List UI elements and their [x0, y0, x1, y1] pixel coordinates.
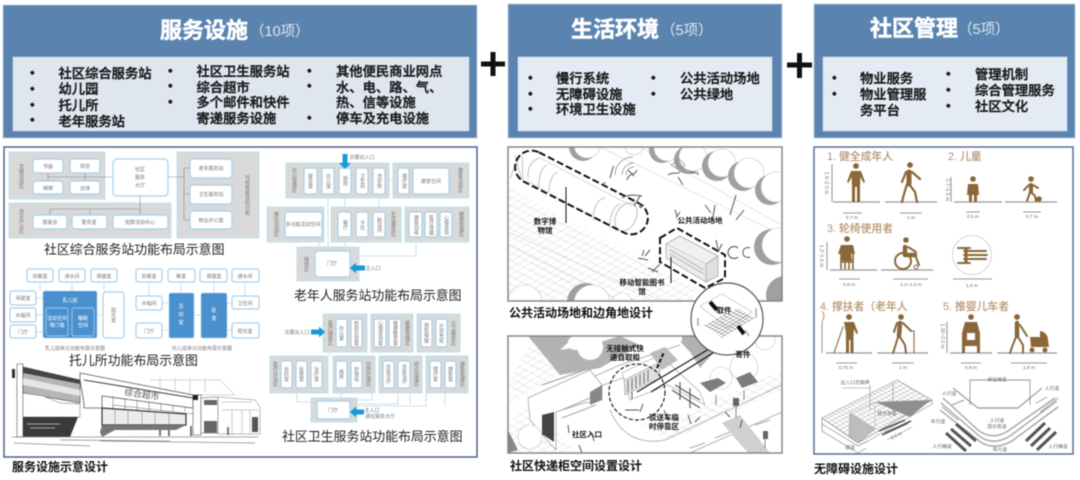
diagram: community health station layout: 办公室	[338, 325, 344, 341]
diagram: nursery layout: 卧	[211, 307, 217, 314]
group 4: assisted walker (elderly): ）	[821, 310, 832, 323]
diagram: nursery layout: 活	[178, 303, 184, 310]
list box: community management: 社区文化	[975, 98, 1028, 114]
list box: living environment: •	[528, 101, 533, 116]
list box: service facilities: 社区综合服务站	[58, 65, 152, 81]
list box: service facilities: 热、信等设施	[336, 94, 416, 110]
heading: living environment	[571, 17, 713, 42]
diagram: community health station layout: 预防保健	[423, 322, 429, 344]
list box: service facilities: 其他便民商业网点	[336, 64, 442, 79]
list box: living environment: 公共活动场地	[680, 71, 760, 86]
diagram: curved tactile paving plan	[931, 376, 1068, 453]
diagram: curved tactile paving plan: 缘石坡道	[987, 376, 1007, 383]
diagram: nursery layout: 双餐室	[141, 273, 157, 280]
diagram: community health station layout: 综合治理区	[413, 361, 419, 387]
diagram: elderly service station layout: 心理咨询	[443, 214, 449, 236]
panel: living environment header	[508, 4, 782, 138]
heading: living environment: （5项）	[661, 22, 713, 39]
diagram: elderly service station layout: 医疗保健	[428, 215, 434, 236]
diagram: community health station layout: 通往服务大厅	[365, 413, 395, 420]
diagram: community service station layout: 棋牌	[43, 185, 53, 192]
diagram: community service station layout: 阅览	[80, 163, 90, 170]
street poles and people	[568, 392, 768, 453]
heading: community management: 社区管理	[870, 16, 958, 41]
list box: community management: 物业管理服	[860, 86, 926, 102]
diagram: curved tactile paving plan: 人行横道	[932, 443, 952, 450]
diagram: curb ramp isometric: 坡道	[845, 444, 855, 451]
illustration: supermarket building	[12, 364, 260, 446]
list box: living environment: 公共绿地	[680, 87, 733, 102]
diagram: community health station layout: 处置室	[298, 366, 304, 382]
illustration: digital museum pavilion	[526, 158, 642, 235]
people and plants sketches	[603, 157, 750, 272]
diagram: nursery layout: 保健室	[206, 273, 222, 280]
diagram: nursery layout: 睡眠	[78, 315, 88, 322]
diagram: community service station layout: 物业办公室	[198, 217, 224, 224]
label: delivery vehicle stop: 驳送车临	[649, 412, 679, 422]
diagram: nursery layout: 乳儿班	[62, 297, 78, 304]
diagram: community service station layout: 警务室	[81, 219, 97, 226]
label: digital museum: 数字博	[534, 216, 557, 226]
list box: service facilities: •	[307, 63, 312, 78]
diagram: community health station layout: 公卫服务区	[450, 320, 456, 346]
label: public activity area: 公共活动场地	[678, 215, 723, 225]
diagram: nursery layout: 阳光室	[237, 328, 253, 335]
list box: living environment: 慢行系统	[556, 70, 609, 86]
diagram: elderly service station layout: 卫生间	[359, 174, 365, 190]
diagram: nursery layout: 门厅	[18, 329, 28, 336]
list box: community management: 物业服务	[860, 71, 913, 86]
label: delivery vehicle stop: 时停靠区	[649, 421, 679, 431]
diagram: elderly service station layout: 餐厅	[342, 219, 348, 230]
label: no-contact locker	[606, 343, 644, 362]
diagram: community service station layout: 可统筹建设的功能	[244, 175, 250, 216]
group 5: stroller pusher: 0.8 m	[965, 365, 977, 371]
dashed circle: no-contact locker zone	[609, 364, 665, 420]
group 5: stroller pusher: 1.8 m	[1023, 365, 1035, 371]
list box: living environment: •	[528, 86, 533, 101]
diagram: elderly service station layout: 多功能活动空间	[285, 221, 321, 228]
diagram: curved tactile paving plan: 车行道	[993, 446, 1007, 453]
diagram: community health station layout: 医疗辅助区	[327, 320, 333, 346]
plus sign 2	[787, 53, 812, 78]
list box: service facilities: 多个邮件和快件	[196, 94, 290, 110]
group 3: wheelchair user: 3. 轮椅使用者	[827, 221, 893, 235]
diagram: nursery layout: 喂汀箱	[49, 322, 65, 329]
label: digital museum	[534, 216, 557, 235]
diagram: elderly service station layout: 主入口	[365, 265, 381, 272]
diagram: curved tactile paving plan: 人行道	[990, 417, 1004, 424]
diagram: nursery layout: 空间	[78, 322, 88, 329]
diagram: community health station layout: 中医诊疗	[385, 363, 391, 385]
list box: service facilities	[13, 57, 469, 131]
inset circle: pickup and sending area	[691, 283, 763, 359]
caption: accessibility design: 无障碍设施设计	[814, 461, 898, 476]
list box: community management: 管理机制	[975, 66, 1028, 82]
diagram: community service station layout: 文娱活动区	[18, 163, 24, 189]
list box: service facilities: 综合超市	[196, 79, 250, 95]
arrow: secondary entrance	[311, 326, 325, 338]
diagram: community service station layout	[9, 152, 259, 238]
title: nursery layout: 托儿所功能布局示意图	[69, 353, 198, 368]
diagram: nursery layout: 餐室	[176, 273, 186, 280]
group 2: child	[944, 149, 1057, 220]
list box: community management: •	[946, 66, 951, 81]
list box: service facilities: •	[307, 78, 312, 93]
group 5: stroller pusher: 5. 推婴儿车者	[943, 299, 1009, 313]
group 2: child: 2. 儿童	[948, 149, 982, 163]
diagram: community health station layout: 护理站	[353, 366, 359, 383]
diagram: curved tactile paving plan: 提示盲道	[987, 423, 1007, 430]
diagram: nursery layout: 室	[178, 319, 184, 326]
label: mobile smart library: 移动智能图书	[620, 277, 665, 287]
label: delivery vehicle stop	[649, 412, 679, 431]
diagram: community service station layout: 党群活动中心	[125, 219, 155, 226]
list box: service facilities: 社区卫生服务站	[196, 64, 290, 79]
diagram: curb ramp isometric	[822, 379, 932, 453]
panel: service facility diagrams	[4, 147, 477, 457]
diagram: community health station layout: 住院护理区	[365, 361, 371, 387]
diagram: elderly service station layout: 助浴间	[376, 217, 382, 234]
diagram: community health station layout: 健康管理区	[404, 320, 410, 346]
diagram: curved tactile paving plan: 车行道	[931, 418, 945, 425]
diagram: community health station layout: 全科室	[283, 366, 289, 382]
diagram: elderly service station layout: 康乐活动区	[273, 211, 279, 237]
list box: living environment	[518, 57, 772, 131]
panel: community management header	[814, 4, 1075, 138]
list box: living environment: •	[651, 86, 656, 101]
diagram: elderly service station layout: 次要出入口	[349, 154, 375, 161]
list box: community management: •	[946, 82, 951, 97]
list box: community management: •	[946, 98, 951, 113]
caption: service facility design: 服务设施示意设计	[12, 459, 108, 474]
diagram: curved tactile paving plan: 人行道	[942, 390, 956, 397]
group 3: wheelchair user: 0.8 m	[843, 282, 855, 288]
label: pickup: 取件	[716, 305, 732, 315]
list box: community management: 综合管理服务	[975, 82, 1055, 98]
diagram: community health station layout: 心理咨询室	[377, 320, 383, 346]
diagram: nursery layout: 通水间	[237, 273, 253, 280]
diagram: elderly service station layout: 生活服务区	[390, 211, 396, 237]
diagram: community health station layout: 病房	[338, 368, 344, 380]
list box: service facilities: •	[30, 81, 35, 96]
diagram: community service station layout: 大厅	[135, 182, 145, 189]
group 1: able-bodied adult: 1.6~2.0 m	[823, 172, 829, 194]
list box: service facilities: •	[30, 65, 35, 80]
diagram: community service station layout: 卫生服务站	[198, 191, 224, 198]
panel: accessibility diagrams	[814, 147, 1073, 454]
label: send: 寄件	[736, 349, 751, 359]
group 5: stroller pusher: 1.35~2.0 m	[939, 323, 945, 349]
group 3: wheelchair user: 1.2~1.4 m	[818, 245, 824, 267]
label: digital museum: 物馆	[538, 225, 553, 235]
list box: service facilities: 幼儿园	[58, 82, 98, 96]
list box: service facilities: •	[30, 97, 35, 112]
diagram: nursery layout	[10, 269, 259, 352]
list box: living environment: 无障碍设施	[556, 86, 622, 102]
list box: service facilities: 托儿所	[58, 98, 98, 113]
diagram: community health station layout: 医疗诊治区	[272, 362, 278, 387]
caption: public space design: 公共活动场地和边角地设计	[509, 305, 653, 320]
diagram: elderly service station layout: 康复活动区	[457, 167, 463, 193]
caption: parcel locker design: 社区快递柜空间设置设计	[510, 458, 642, 473]
diagram: community service station layout: 服务	[135, 174, 145, 181]
diagram: curved tactile paving plan: 人行横道	[1048, 443, 1068, 450]
diagram: elderly service station layout: 报告室	[307, 173, 313, 189]
trees	[508, 147, 782, 301]
group 3: wheelchair user: 1.5 m	[966, 283, 978, 289]
list box: service facilities: 水、电、路、气、	[336, 80, 442, 95]
diagram: community service station layout: 社区	[135, 166, 145, 173]
list box: living environment: •	[651, 70, 656, 85]
list box: service facilities: •	[168, 63, 173, 78]
list box: living environment: 环境卫生设施	[556, 101, 636, 117]
diagram: curb ramp isometric: 提示盲道	[877, 410, 897, 417]
label: no-contact locker: 递自取柜	[610, 352, 640, 362]
diagram: elderly service station layout: 康复训练	[413, 214, 419, 235]
group 4: assisted walker (elderly): 0.75 m	[839, 365, 853, 371]
title: elderly service station layout: 老年人服务站功能布局示意图	[294, 288, 462, 303]
title: community service station layout: 社区综合服务站功能布局示意图	[44, 242, 224, 257]
diagram: elderly service station layout: 办公管理区	[291, 167, 297, 193]
group 1: able-bodied adult: 1 m	[907, 215, 915, 221]
title: community health station layout: 社区卫生服务站功能布局示意图	[282, 429, 462, 444]
diagram: elderly service station layout	[267, 154, 469, 281]
diagram: community health station layout: 理疗室	[432, 366, 438, 382]
diagram: nursery layout: 双餐室	[32, 273, 48, 280]
diagram: community health station layout: 检验化验室	[353, 320, 359, 346]
callout lines: to inset	[636, 349, 714, 393]
list box: service facilities: •	[168, 78, 173, 93]
diagram: nursery layout: 室	[211, 315, 217, 322]
diagram: nursery layout: 母婴室	[15, 295, 31, 302]
diagram: elderly service station layout: 门厅	[327, 260, 337, 267]
diagram: community service station layout: 会议办公区	[18, 208, 24, 234]
group 4: assisted walker (elderly): 4. 撑扶者（老年人	[820, 299, 908, 313]
diagram: community service station layout: 老年服务站	[198, 165, 224, 172]
group 4: assisted walker (elderly)	[820, 299, 928, 371]
heading: service facilities: （10项）	[250, 23, 310, 40]
heading: community management	[870, 16, 1010, 41]
label: no-contact locker: 无接触式快	[606, 343, 644, 353]
diagram: nursery layout: 托儿班单元功能布局示意图	[172, 345, 232, 352]
diagram: community health station layout: 次要出入口	[284, 329, 310, 336]
list box: community management: 务平台	[860, 102, 900, 118]
label: mobile smart library	[620, 277, 665, 296]
label: mobile smart library: 馆	[638, 286, 646, 296]
diagram: elderly service station layout: 康复空间	[421, 178, 441, 185]
diagram: community service station layout: 居委会	[42, 219, 58, 226]
diagram: community health station layout: 主入口	[364, 407, 380, 414]
list box: community management: •	[832, 70, 837, 85]
diagram: elderly service station layout: 理疗室	[401, 174, 407, 189]
group 2: child: 0.7 m	[1026, 214, 1038, 220]
panel: service facilities header	[3, 5, 477, 138]
diagram: curb ramp isometric: 出入口无障碍	[841, 379, 870, 386]
diagram: community health station layout: 康复室	[447, 366, 453, 382]
diagram: community health station layout: 门厅	[328, 407, 338, 414]
dashed outline: mobile smart library	[660, 228, 725, 288]
group 1: able-bodied adult: 1. 健全成年人	[827, 149, 893, 163]
panel: parcel locker scene	[508, 330, 782, 453]
diagram: elderly service station layout: 洗衣房	[376, 173, 382, 190]
group 3: wheelchair user: 1.2~1.5 m	[900, 282, 922, 288]
group 2: child: 0.7~1.5 m	[944, 179, 950, 201]
group 3: wheelchair user	[818, 221, 992, 289]
diagram: nursery layout: 卫生间	[237, 300, 253, 307]
list box: service facilities: 老年服务站	[58, 113, 125, 129]
diagram: nursery layout: 动	[178, 311, 184, 318]
group 2: child: 0.5 m	[967, 214, 979, 220]
illustration: supermarket building: 综合超市	[124, 386, 160, 402]
list box: community management	[823, 57, 1067, 131]
diagram: community health station layout: 计划免疫	[438, 322, 444, 344]
list box: service facilities: •	[168, 94, 173, 109]
list box: service facilities: 停车及充电设施	[336, 110, 429, 126]
group 4: assisted walker (elderly): 1 m	[899, 365, 907, 371]
diagram: nursery layout: 阳光室	[110, 307, 116, 323]
group 5: stroller pusher	[939, 299, 1057, 371]
list box: service facilities: •	[30, 112, 35, 127]
diagram: curb ramp isometric: 0.6 m	[890, 431, 903, 441]
diagram: nursery layout: 门厅	[144, 328, 154, 335]
group 1: able-bodied adult	[823, 149, 937, 221]
heading: living environment: 生活环境	[571, 17, 659, 42]
list box: service facilities: 寄递服务设施	[196, 110, 276, 126]
arrow: secondary entrance	[339, 154, 351, 169]
diagram: community service station layout: 台球	[80, 185, 90, 192]
callout line: digital museum	[566, 187, 671, 283]
diagram: elderly service station layout: 卡拉	[359, 219, 365, 231]
diagram: elderly service station layout: 健康管理区	[458, 211, 464, 237]
heading: community management: （5项）	[958, 21, 1010, 38]
heading: service facilities: 服务设施	[160, 18, 248, 43]
group 1: able-bodied adult: 0.7 m	[846, 215, 858, 221]
list box: living environment: •	[528, 70, 533, 85]
diagram: community service station layout: 书画	[43, 163, 53, 170]
panel: public space scene	[506, 146, 784, 302]
diagram: elderly service station layout: 接待区	[303, 256, 309, 272]
diagram: community health station layout: 健康教育室	[392, 320, 398, 346]
plus sign 1	[481, 52, 505, 76]
diagram: elderly service station layout: 办公室	[325, 173, 331, 189]
illustration: locker building	[622, 347, 758, 408]
diagram: community health station layout: 康复管理区	[459, 361, 465, 387]
label: community entrance: 社区入口	[572, 429, 602, 439]
illustration: mobile library container	[666, 236, 718, 282]
illustration: community gate	[508, 370, 602, 453]
diagram: curved tactile paving plan: 人行道	[1045, 385, 1059, 392]
diagram: nursery layout: 乳儿班单元功能布局示意图	[45, 345, 105, 352]
diagram: community health station layout	[270, 314, 468, 422]
list box: service facilities: •	[307, 110, 312, 125]
diagram: community health station layout: 中医治疗	[401, 363, 407, 385]
diagram: nursery layout: 保健室	[96, 273, 112, 280]
dashed outline: digital museum	[513, 148, 650, 236]
diagram: nursery layout: 活动空间	[47, 315, 67, 322]
diagram: elderly service station layout: 厨房	[342, 176, 348, 187]
diagram: nursery layout: 水幅间	[141, 300, 157, 307]
arrow: main entrance	[350, 262, 365, 274]
diagram: nursery layout: 通水间	[64, 273, 80, 280]
diagram: community health station layout: 治疗室	[313, 366, 319, 382]
list box: community management: •	[832, 86, 837, 101]
heading: service facilities	[160, 18, 310, 43]
arrow: main entrance	[350, 406, 364, 418]
diagram: nursery layout: 水幅间	[15, 312, 31, 319]
